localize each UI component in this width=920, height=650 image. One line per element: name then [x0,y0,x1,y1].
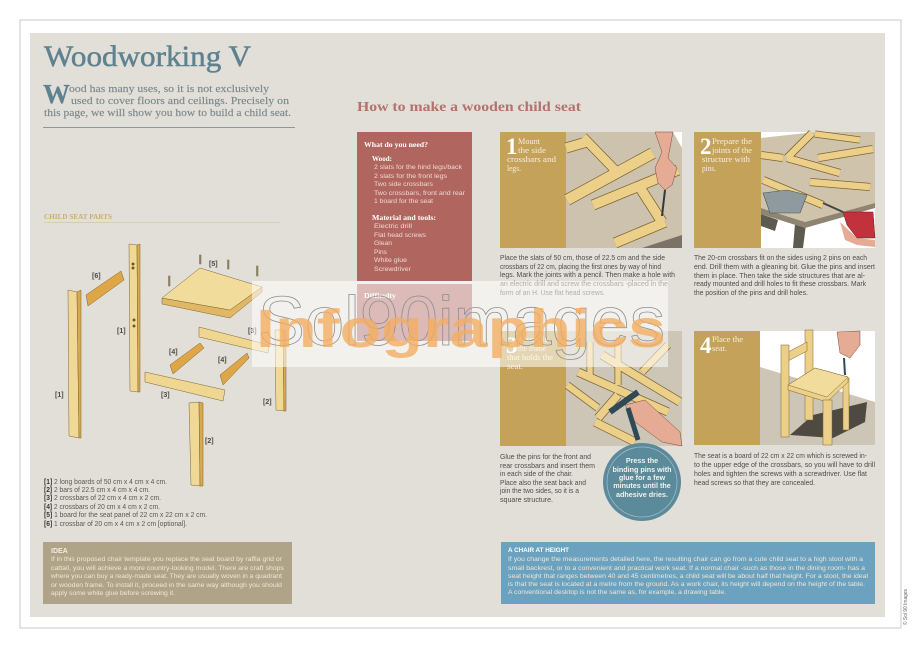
step 3 text: Place also the seat back and [500,478,586,487]
step 4 text: head screws so that they are concealed. [694,478,815,487]
step 2 text: end. Drill them with a gleaning bit. Glue the pins and insert [694,262,875,271]
step 2 text: them in place. Then take the side structures that are al- [694,271,866,280]
step 3 text: join the two sides, so it is a [499,486,580,495]
callout circle: binding pins with [612,465,672,474]
step 4 text: The seat is a board of 22 cm x 22 cm which is screwed in- [694,451,868,460]
front leg [189,402,203,486]
part number labels [55,261,272,445]
step 4 gold box: 4 [700,333,712,358]
step 1 text [500,253,675,297]
panel: what do you need: Electric drill [374,223,413,230]
long leg back [129,244,140,392]
callout circle: minutes until the [613,481,671,490]
idea box: cattail, you will achieve a more country-looking model. There are craft shops [51,565,285,572]
step 4 text: to the upper edge of the crossbars, so you will have to drill [694,460,875,469]
right rear leg [275,330,286,411]
callout circle: adhesive dries. [616,490,668,499]
step 1 text: legs. Mark the joints with a pencil. Then make a hole with [500,270,675,279]
step 2 gold box: Prepare the [712,137,752,146]
panel: what do you need: 2 slats for the hind legs/back [374,164,463,171]
step 3 gold box: the frame [518,344,546,353]
panel: difficulty: Difficulty [364,293,397,300]
intro text block: used to cover floors and ceilings. Precisely on [71,95,290,107]
parts list: [1] 2 long boards of 50 cm x 4 cm x 4 cm. [44,479,167,486]
step 3 gold box: Assemble [518,335,548,344]
step 3 gold box: seat. [507,362,523,371]
seat board [162,268,262,318]
panel: what do you need: Flat head screws [374,232,427,239]
step 4 illustration [760,330,875,445]
panel: what do you need: Two crossbars, front and rear [374,190,466,197]
part number labels: [1] [117,328,126,335]
parts list: [5] 1 board for the seat panel of 22 cm x 22 cm x 2 cm. [44,512,207,519]
step 3 illustration [566,331,682,446]
step 3 text: Glue the pins for the front and [500,452,591,461]
panel: what do you need: Material and tools: [372,215,436,222]
idea box: where you can buy a ready-made seat. They are usually woven in a quadrant [50,573,282,580]
watermark: Infographics [256,299,666,359]
parts list: [2] 2 bars of 22.5 cm x 4 cm x 4 cm. [44,487,150,494]
step 2 gold box [694,132,761,248]
step 1 gold box: crossbars and [507,155,556,164]
step 3 gold box: 3 [506,333,518,358]
step 2 gold box: 2 [700,134,712,159]
step 1 gold box: the side [518,146,546,155]
step 2 gold box: pins. [702,164,716,173]
panel: what do you need: 2 slats for the front legs [374,173,448,180]
intro text block [43,79,291,119]
step 1 gold box: legs. [507,164,521,173]
idea box: If in this proposed chair template you replace the seat board by raffia grid or [51,556,283,563]
callout circle [603,443,681,521]
step 1 gold box [500,132,566,248]
intro text block: ood has many uses, so it is not exclusively [69,83,270,95]
step 2 gold box: structure with [702,155,750,164]
parts list: [6] 1 crossbar of 20 cm x 4 cm x 2 cm [optional]. [44,521,187,528]
step 3 gold box: that holds the [507,353,553,362]
part number labels: [4] [169,349,178,356]
blue box: a chair at height [501,542,875,604]
blue box: a chair at height: If you change the measurements detailed here, the resulting chair can go from a cute child seat to a high stool with a [508,556,863,563]
step 1 gold box: 1 [506,134,518,159]
panel: what do you need: 1 board for the seat [374,198,433,205]
step 2 gold box: joints of the [711,146,752,155]
step 1 gold box: Mount [518,137,541,146]
part number labels: [4] [218,357,227,364]
step 2 text: ready mounted and drill holes to fit these crossbars. Mark [694,279,866,288]
panel: what do you need: White glue [374,257,407,264]
step 2 text [694,253,875,297]
step 4 gold box [694,331,760,445]
step 1 text: Place the slats of 50 cm, those of 22.5 cm and the side [500,253,665,262]
step 3 gold box [500,331,566,446]
part number labels: [3] [161,392,170,399]
parts list [44,479,207,528]
idea box: IDEA [51,548,68,555]
step 4 text [694,451,875,487]
panel: what do you need: Glean [374,240,392,247]
front crossbar [145,372,225,401]
idea box: apply some white glue before screwing it. [51,590,175,597]
blue box: a chair at height: small backrest, or to a convenient and practical work seat. If a normal chair -such as those in the dining room- has a [508,565,865,572]
blue box: a chair at height: is that the seat is located at a metre from the ground. As a work chair, its height will depend on the height of the table. [508,581,865,588]
part number labels: [5] [209,261,218,268]
crossbar 6 [86,271,124,306]
part number labels: [6] [92,273,101,280]
parts list: [4] 2 crossbars of 20 cm x 4 cm x 2 cm. [44,504,160,511]
copyright: © Sol 90 Images [902,589,909,625]
part number labels: [2] [263,399,272,406]
callout circle: glue for a few [619,473,666,482]
parts list: [3] 2 crossbars of 22 cm x 4 cm x 2 cm. [44,495,161,502]
screws [168,255,258,286]
long leg left [68,290,81,438]
panel: what do you need: Pins [374,249,388,256]
side crossbar right [220,353,249,385]
step 4 text: holes and tighten the screws with a screwdriver. Use flat [694,469,867,478]
idea box: or wooden frame. To install it, proceed in the same way although you should [51,582,282,589]
part number labels: [3] [248,328,257,335]
step 1 illustration [566,132,682,248]
step 2 illustration [761,132,875,248]
exploded diagram of chair parts [68,244,286,486]
step 3 text: rear crossbars and insert them [500,461,595,470]
step 3 text [499,452,595,504]
step 1 text: crossbars of 22 cm, placing the first ones by way of hind [500,262,661,271]
intro text block: W [43,79,70,109]
step 3 text: square structure. [500,495,553,504]
part number labels: [1] [55,392,64,399]
panel: difficulty [357,284,472,341]
step 4 gold box: seat. [712,344,727,353]
idea box [43,542,292,604]
panel: what do you need [357,132,472,281]
side crossbar left [170,343,204,374]
title: Woodworking V [44,40,251,73]
main heading: How to make a wooden child seat [357,100,581,115]
step 4 gold box: Place the [712,335,743,344]
part number labels: [2] [205,438,214,445]
step 3 text: in each side of the chair. [500,469,573,478]
step 2 text: the position of the pins and drill holes. [694,288,808,297]
panel: what do you need: Wood: [372,156,392,163]
step 1 text: an electric drill and screw the crossbars -placed in the [500,279,668,288]
callout circle: Press the [626,456,658,465]
panel: what do you need: Two side crossbars [374,181,434,188]
rear crossbar [199,327,269,353]
watermark: Sol90images [258,282,665,360]
blue box: a chair at height: A CHAIR AT HEIGHT [508,547,570,554]
step 2 text: The 20-cm crossbars fit on the sides using 2 pins on each [694,253,867,262]
panel: what do you need: What do you need? [364,142,428,149]
panel: what do you need: Screwdriver [374,266,412,273]
intro text block: this page, we will show you how to build a child seat. [44,107,291,119]
step 1 text: form of an H. Use flat head screws. [500,288,605,297]
section heading: child seat parts: CHILD SEAT PARTS [44,213,112,221]
blue box: a chair at height: A conventional desktop is not the same as, for example, a drawing table. [508,589,726,596]
blue box: a chair at height: seat height that ranges between 40 and 45 centimetres, a child seat will be about half that height. For a stool, the ideal [508,573,869,580]
